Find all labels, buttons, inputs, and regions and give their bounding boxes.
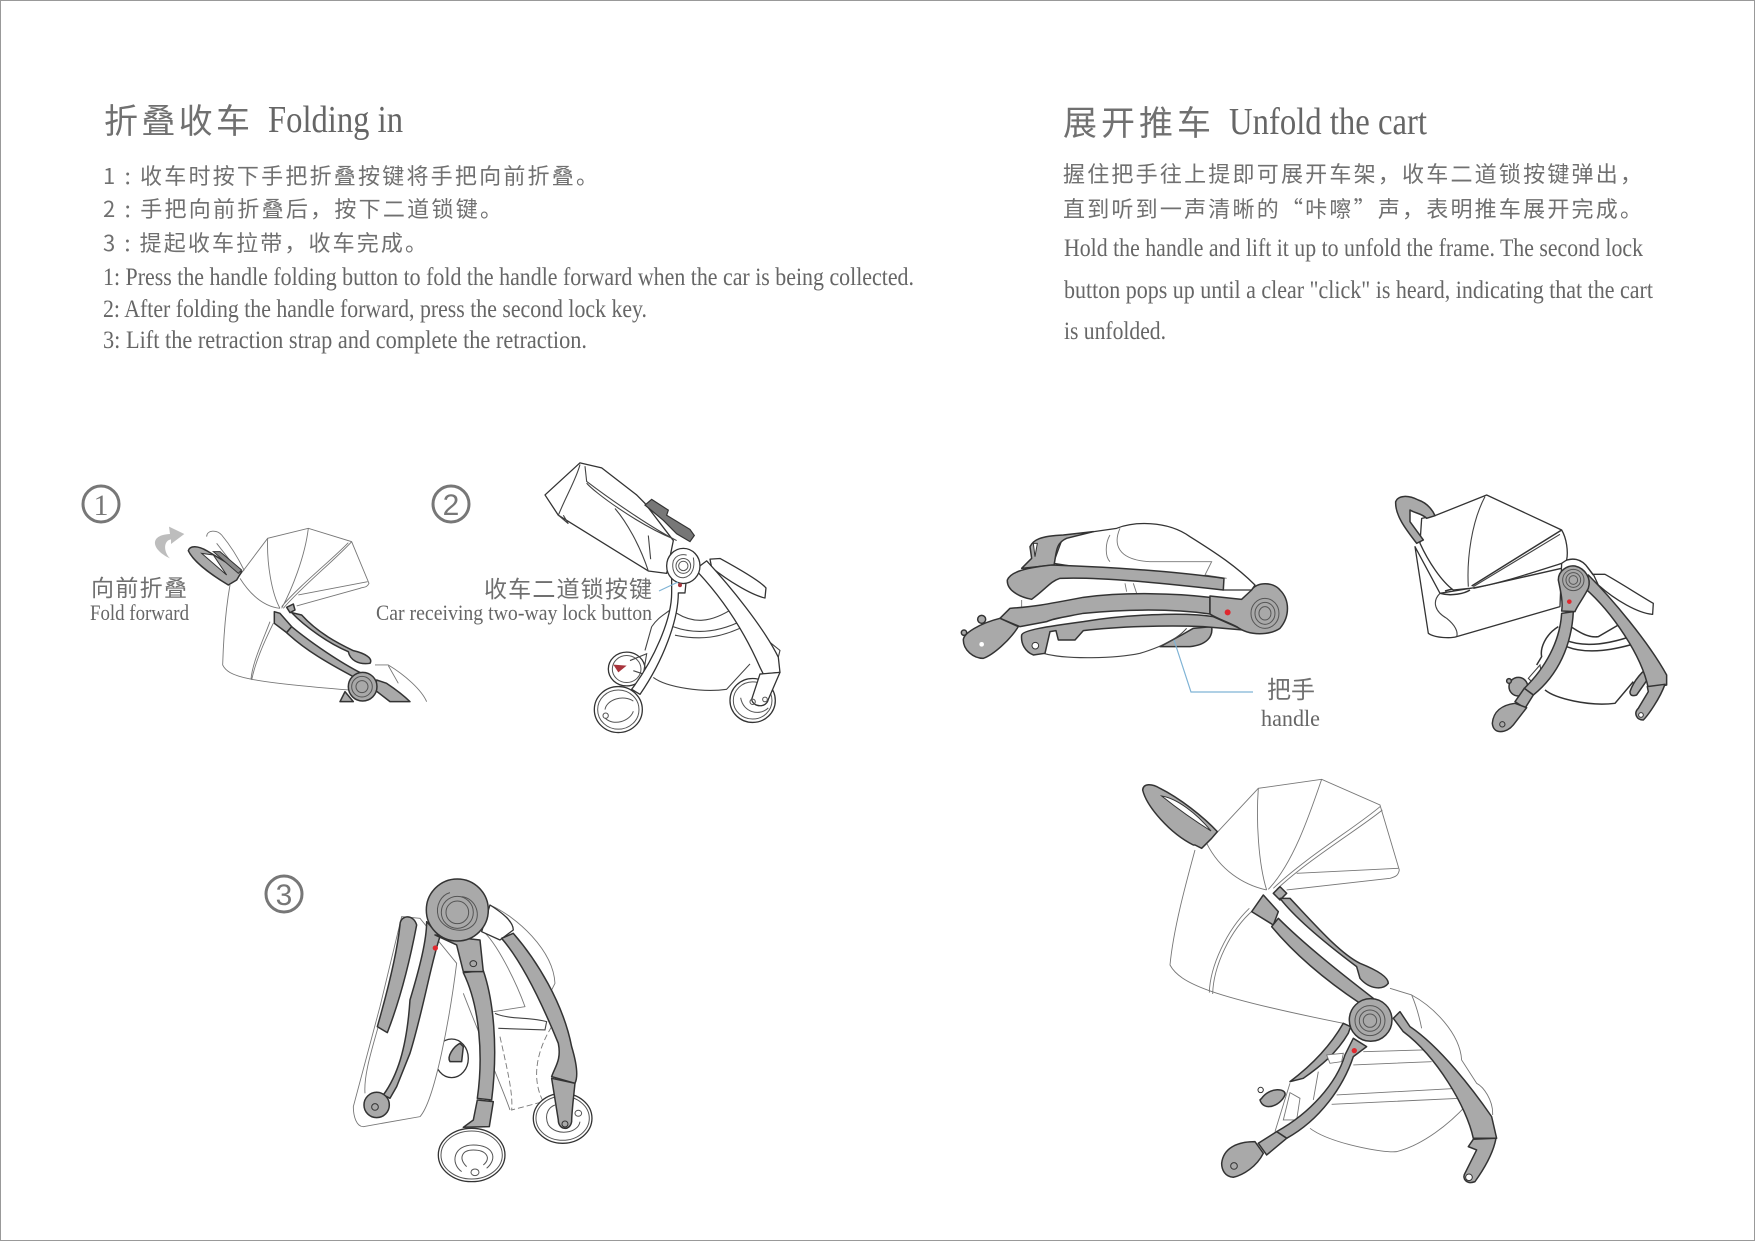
- text: Chinese step 3: 3 : 提起收车拉带，收车完成。: [103, 226, 427, 258]
- seat cushion: [710, 558, 766, 598]
- right wheel: [730, 672, 780, 722]
- hub: [1349, 999, 1392, 1041]
- rear arm: [1393, 1012, 1497, 1183]
- red dot: [1567, 599, 1572, 604]
- hinge: [348, 672, 377, 701]
- handle grip: [188, 547, 242, 585]
- canopy: [1207, 779, 1399, 890]
- left foot: [364, 1092, 389, 1118]
- strap tab: [1327, 1053, 1343, 1063]
- label: fold forward English: Fold forward: [90, 600, 189, 625]
- arrow: fold forward: [155, 527, 184, 558]
- right arm: [482, 905, 577, 1083]
- handle: [1396, 496, 1435, 543]
- text: English step 2: 2: After folding the handle forward, press the second lock key.: [103, 296, 647, 323]
- front arm: [1524, 612, 1573, 695]
- upper pad: [1273, 887, 1388, 988]
- short bar: [377, 917, 417, 1033]
- red dot: [433, 945, 438, 951]
- text: English unfold line 2: button pops up until a clear "click" is heard, indicating that the cart: [1064, 277, 1653, 304]
- strut: [1290, 1023, 1351, 1082]
- hub: [1210, 584, 1287, 634]
- rear wheel: [435, 1039, 468, 1078]
- body outline: [1022, 524, 1255, 608]
- main tube: [1252, 895, 1373, 1003]
- centre leg: [463, 971, 495, 1127]
- label: fold forward Chinese: 向前折叠: [91, 569, 187, 603]
- red dot: [1225, 609, 1231, 615]
- canopy and body outline: [207, 528, 427, 702]
- text: English unfold line 3: is unfolded.: [1064, 318, 1166, 345]
- left arm: [383, 922, 440, 1098]
- icon: step number 3: 3: [276, 879, 292, 912]
- illustration: stroller half unfolded: [1396, 495, 1667, 732]
- rear wheel and lever: [608, 652, 647, 686]
- icon: step number 1: [83, 486, 119, 522]
- clipped legs: [340, 680, 410, 702]
- rear leg: [698, 561, 780, 674]
- body: [1170, 850, 1343, 1023]
- front leg: [632, 576, 687, 694]
- hinge: [667, 548, 700, 583]
- right wheel: [533, 1078, 592, 1143]
- left lug: [961, 615, 1018, 658]
- text: Chinese step 2: 2 : 手把向前折叠后，按下二道锁键。: [103, 192, 502, 224]
- folded canopy: [545, 463, 677, 573]
- red lock button: [678, 583, 682, 587]
- illustration: stroller step 2, second lock: [545, 463, 780, 733]
- handle: [1143, 785, 1217, 848]
- leader line: handle: [1174, 640, 1253, 692]
- handle pad: [287, 604, 371, 664]
- basket: [1537, 625, 1642, 704]
- bottom cover: [1043, 628, 1187, 658]
- outlines: [353, 905, 555, 1127]
- grey upper cover: [1022, 532, 1093, 568]
- label: handle Chinese: 把手: [1267, 670, 1315, 705]
- hub: [1558, 566, 1589, 612]
- hub and arm: [426, 879, 488, 972]
- illustration: stroller step 1, handle folding forward: [155, 527, 427, 702]
- heading: folding in: Folding in: [268, 99, 403, 141]
- foot: [1492, 688, 1533, 732]
- heading: unfold the cart: Unfold the cart: [1229, 101, 1427, 143]
- pedal: [1258, 1087, 1285, 1107]
- foot: [1222, 1132, 1287, 1177]
- lower arm and lug: [1022, 614, 1243, 655]
- leader line: lock button: [659, 582, 678, 591]
- icon: step number 1: 1: [94, 489, 108, 522]
- body: [1415, 547, 1562, 638]
- front wheel: [594, 687, 642, 733]
- icon: step number 3: [266, 876, 302, 912]
- heading: unfold the cart: 展开推车: [1063, 96, 1211, 145]
- red dot: [1352, 1048, 1357, 1053]
- seat and basket: [1275, 988, 1493, 1152]
- basket: [645, 608, 780, 690]
- text: Chinese unfold line 2: 直到听到一声清晰的“咔嚓”声，表明推车展开完成。: [1063, 192, 1642, 224]
- panel: unfold instructions: [1063, 96, 1653, 345]
- top arch: [1562, 559, 1593, 575]
- text: English unfold line 1: Hold the handle and lift it up to unfold the frame. The second lock: [1064, 235, 1643, 262]
- illustration: fully unfolded stroller: [1143, 779, 1497, 1183]
- text: English step 3: 3: Lift the retraction strap and complete the retraction.: [103, 327, 587, 354]
- label: lock button English: Car receiving two-way lock button: [376, 600, 652, 625]
- pedal: [1507, 665, 1542, 696]
- rear arm and feet: [1585, 575, 1667, 720]
- text: English step 1: 1: Press the handle folding button to fold the handle forward when the car is being collected.: [103, 264, 914, 291]
- front arm: [1277, 1038, 1367, 1138]
- handle bar: [1160, 627, 1212, 647]
- canopy: [1420, 495, 1567, 590]
- heading: folding in: 折叠收车: [104, 94, 250, 143]
- label: handle English: handle: [1261, 706, 1320, 731]
- panel: folding in instructions: [103, 94, 914, 354]
- illustration: folded stroller: [961, 524, 1287, 658]
- middle arm: [1000, 594, 1210, 627]
- label: lock button Chinese: 收车二道锁按键: [484, 570, 652, 604]
- text: Chinese step 1: 1 : 收车时按下手把折叠按键将手把向前折叠。: [103, 159, 598, 191]
- bottom wheel: [438, 1128, 505, 1182]
- illustration: stroller step 3, fully folded: [353, 879, 592, 1182]
- handle pad: [645, 499, 694, 542]
- heading: folding in: [104, 94, 403, 143]
- upper folded tube: [1007, 565, 1224, 599]
- cushion: [1593, 574, 1653, 614]
- frame tube: [274, 612, 362, 677]
- icon: step number 2: [433, 486, 469, 522]
- text: Chinese unfold line 1: 握住把手往上提即可展开车架，收车二道锁按键弹出，: [1063, 157, 1642, 189]
- icon: step number 2: 2: [443, 489, 459, 522]
- heading: unfold the cart: [1063, 96, 1427, 145]
